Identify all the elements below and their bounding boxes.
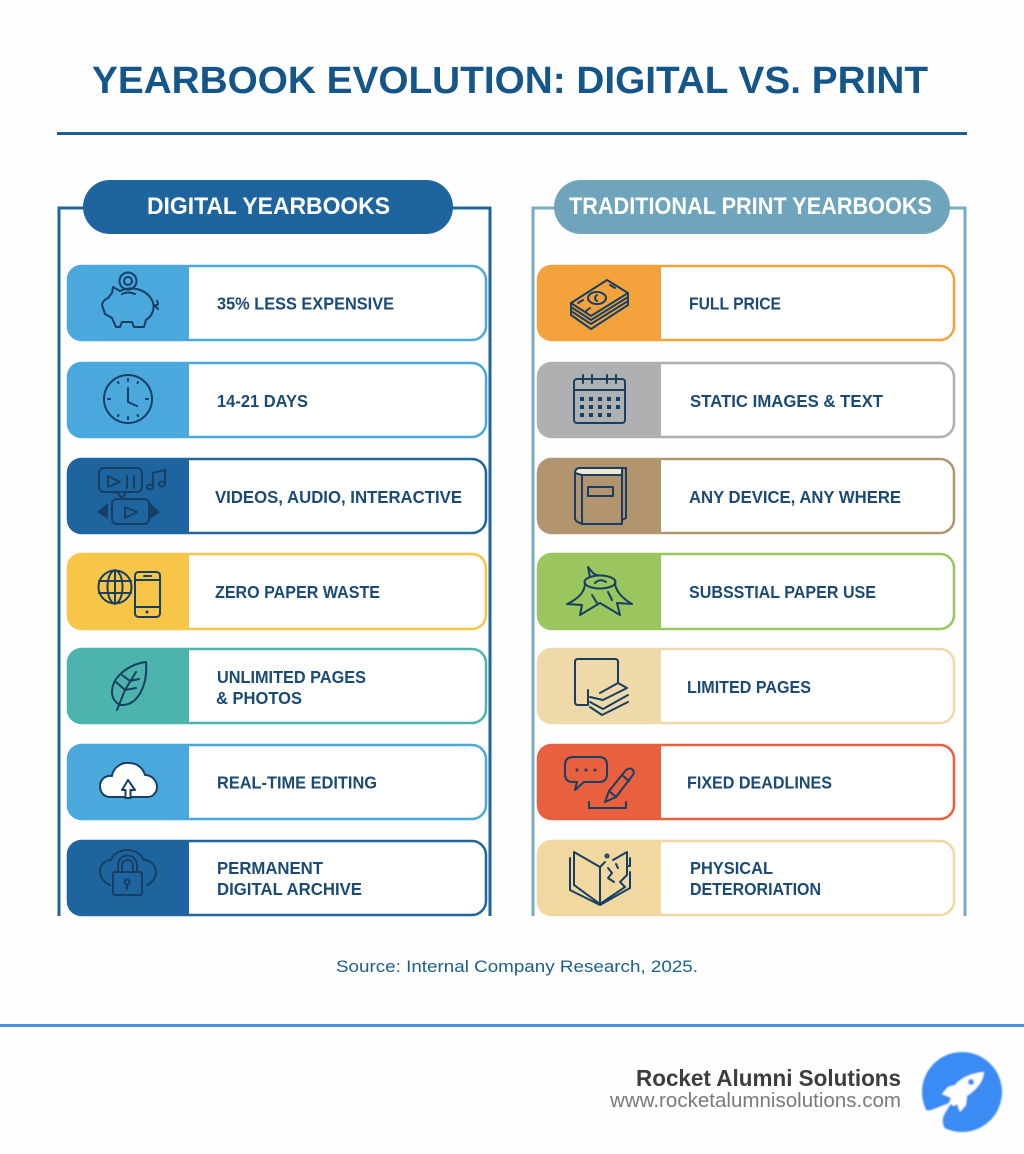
row: cost print: FULL PRICE [689,294,781,314]
panel: traditional print yearbooks [533,180,965,916]
icon: video and audio [97,468,165,524]
source note: Source: Internal Company Research, 2025. [336,958,698,976]
row: deterioration print [537,840,954,916]
row: editing digital [67,744,486,820]
digital heading pill [83,180,453,234]
icon: leaf [112,662,146,710]
icon: closed book [575,468,626,524]
print heading pill: TRADITIONAL PRINT YEARBOOKS [569,193,932,220]
row: media digital: VIDEOS, AUDIO, INTERACTIVE [215,487,462,507]
row: access print [537,458,954,534]
row: paper print [537,553,954,630]
row: limited pages print [537,648,954,724]
row: archive digital [67,840,486,916]
row: time digital [67,362,486,438]
icon: sheets of paper [575,659,628,715]
row: archive digital: DIGITAL ARCHIVE [217,879,362,899]
icon: cloud lock [100,850,156,895]
row: access print: ANY DEVICE, ANY WHERE [689,487,901,507]
icon: piggy bank [102,272,158,327]
row: deadlines print [537,744,954,820]
row: paper print: SUBSSTIAL PAPER USE [689,582,876,602]
icon: clock [104,375,152,423]
row: deterioration print: PHYSICAL [690,858,773,878]
digital heading pill: DIGITAL YEARBOOKS [147,193,390,220]
row: limited pages print: LIMITED PAGES [687,677,811,697]
row: editing digital: REAL-TIME EDITING [217,772,377,792]
icon: tree stump [567,567,632,615]
icon: rocket logo [912,1052,1002,1140]
icon: speech and pen [565,757,634,808]
row: cost digital: 35% LESS EXPENSIVE [217,294,394,314]
row: cost digital [67,265,486,341]
row: pages digital: UNLIMITED PAGES [217,667,366,687]
footer brand name: Rocket Alumni Solutions [636,1065,901,1091]
icon: stack of cash [571,280,628,329]
row: content print [537,362,954,438]
print heading pill [554,180,950,234]
row: cost print [537,265,954,341]
row: deadlines print: FIXED DEADLINES [687,772,832,792]
row: waste digital [67,553,486,630]
row: archive digital: PERMANENT [217,858,323,878]
row: deterioration print: DETERORIATION [690,879,821,899]
row: pages digital: & PHOTOS [216,688,302,708]
icon: cloud upload [100,763,157,798]
icon: globe and phone [98,570,160,617]
row: pages digital [67,648,486,724]
panel: digital yearbooks [59,180,490,916]
row: media digital [67,458,486,534]
row: time digital: 14-21 DAYS [217,391,308,411]
footer url: www.rocketalumnisolutions.com [609,1090,901,1112]
title: YEARBOOK EVOLUTION: DIGITAL VS. PRINT [92,60,928,102]
icon: torn open book [570,852,630,905]
row: waste digital: ZERO PAPER WASTE [215,582,380,602]
icon: calendar [574,375,625,423]
row: content print: STATIC IMAGES & TEXT [690,391,883,411]
